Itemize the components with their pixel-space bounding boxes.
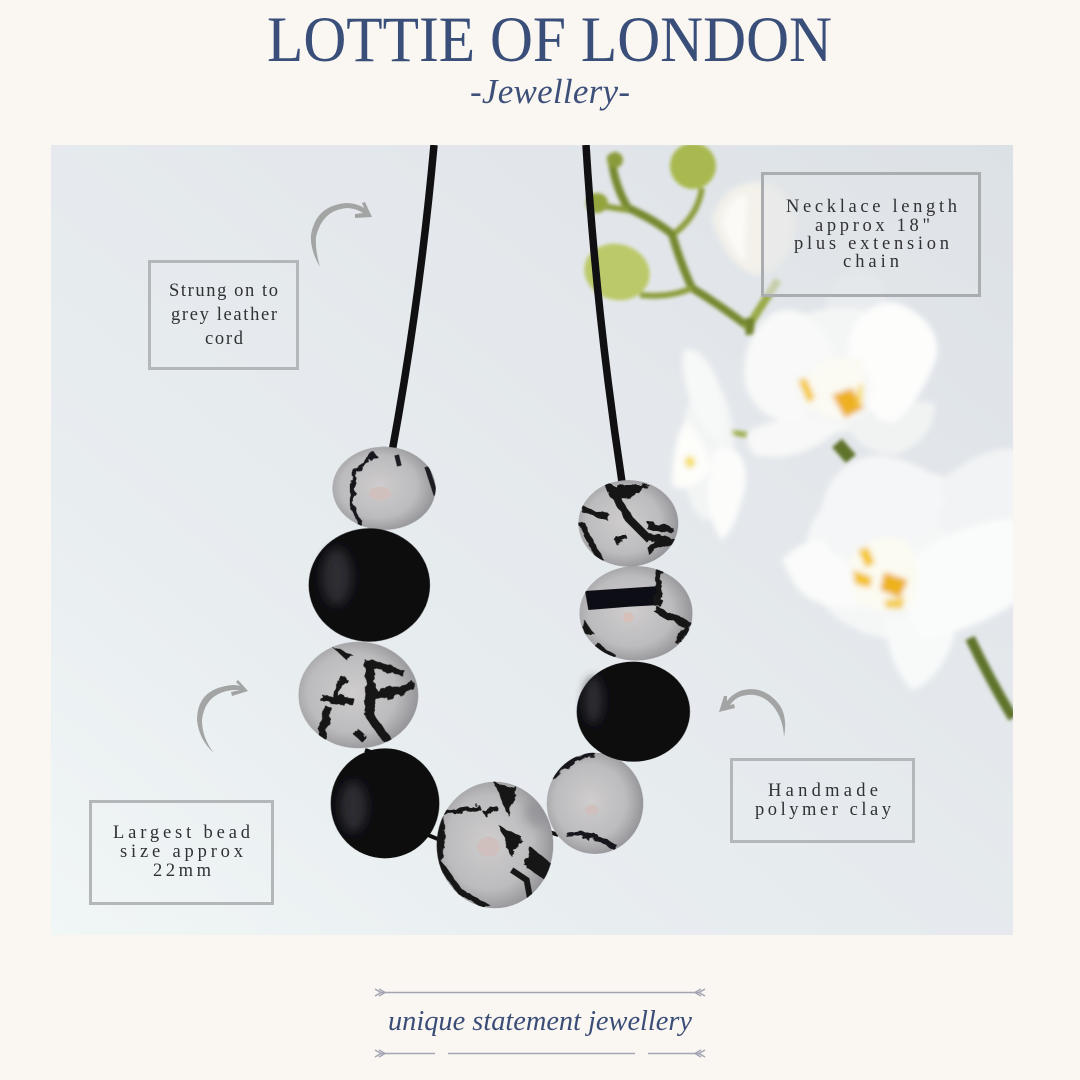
callout: cord: grey leather (171, 305, 277, 325)
bead 2 black (309, 528, 430, 642)
callout: bead size: 22mm (153, 861, 212, 881)
orchid side flower (672, 349, 746, 541)
callout: bead size (90, 802, 272, 904)
arrow: bead size (197, 680, 248, 753)
callout: cord: cord (205, 329, 244, 349)
callout: bead size: size approx (120, 842, 244, 862)
title: LOTTIE OF LONDON (267, 4, 832, 76)
callout: material: polymer clay (755, 800, 892, 820)
orchid bud flower (712, 182, 761, 275)
callout: necklace length: Necklace length (786, 197, 957, 217)
footer bottom ornament (375, 1050, 705, 1057)
panel: product photo (51, 143, 1020, 935)
bead 4 black (331, 748, 439, 858)
callout: cord: Strung on to (169, 281, 278, 301)
callout: material: Handmade (768, 781, 878, 801)
cord links (365, 750, 620, 839)
callout: material (732, 760, 914, 842)
bead 9 silver (578, 480, 678, 567)
tagline: unique statement jewellery (388, 1005, 692, 1037)
callout: cord (150, 262, 298, 368)
bead 8 silver (579, 566, 693, 661)
arrow: cord (311, 202, 372, 267)
bead 6 silver (547, 753, 643, 854)
necklace cords (392, 145, 622, 482)
photo backdrop (51, 145, 1013, 935)
orchid upper flower (744, 297, 938, 458)
orchid lower flower (782, 448, 1020, 690)
callout: necklace length: plus extension (794, 234, 949, 254)
callout: necklace length: approx 18" (815, 216, 930, 236)
bead 3 silver (298, 642, 418, 748)
callout: bead size: Largest bead (113, 823, 251, 843)
orchid stems and buds (578, 143, 1013, 718)
bead 7 black (577, 662, 690, 762)
subtitle: -Jewellery- (470, 72, 630, 111)
footer top ornament (375, 989, 705, 996)
bead 1 silver (332, 447, 436, 530)
necklace beads (298, 447, 693, 908)
bead 5 silver (437, 782, 553, 908)
callout: necklace length: chain (843, 252, 899, 272)
arrow: material (719, 689, 785, 737)
callout: necklace length (762, 174, 980, 296)
